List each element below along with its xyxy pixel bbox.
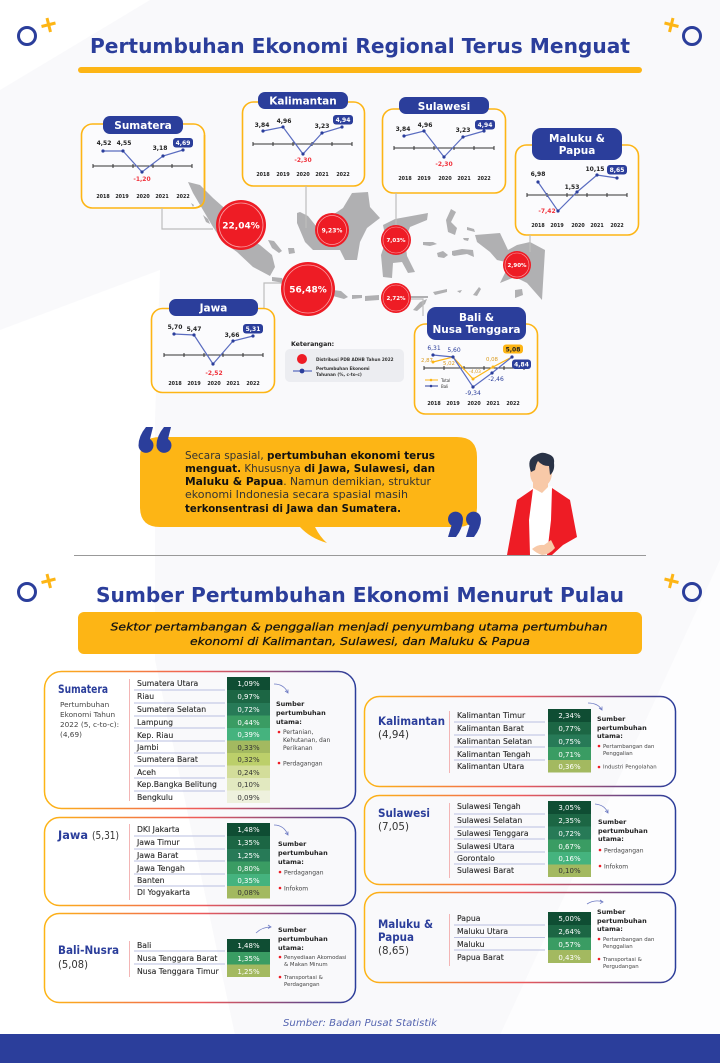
panel: Sulawesi provinces: 3,05% xyxy=(558,804,581,812)
panel: Sumatera provinces: Kehutanan, dan xyxy=(283,737,331,744)
panel: Maluku and Papua chart: 2022 xyxy=(610,223,624,229)
panel: Maluku and Papua provinces: 0,57% xyxy=(558,941,581,949)
panel: Kalimantan provinces: Penggalian xyxy=(603,751,633,757)
panel: Bali-Nusra provinces: Bali xyxy=(137,941,151,950)
bubble: Jawa share: 56,48% xyxy=(289,286,327,296)
panel: Sumatera chart: 2018 xyxy=(96,194,110,200)
panel: Sulawesi provinces: (7,05) xyxy=(378,821,409,833)
panel: Kalimantan provinces: 2,34% xyxy=(558,712,581,720)
panel: Jawa provinces: Infokom xyxy=(284,886,308,892)
panel: Sumatera chart: 2022 xyxy=(176,194,190,200)
callout: quote bubble: terkonsentrasi di Jawa dan Sumatera. xyxy=(185,503,401,515)
map: Sulawesi xyxy=(381,213,428,278)
panel: Sumatera provinces: 0,39% xyxy=(237,731,260,739)
panel: Jawa provinces: DKI Jakarta xyxy=(137,825,180,834)
panel: Bali and Nusa Tenggara chart: 2022 xyxy=(506,401,520,407)
panel: Sulawesi chart xyxy=(382,97,506,193)
panel: Sumatera provinces: Bengkulu xyxy=(137,793,173,802)
panel: Kalimantan provinces: Kalimantan xyxy=(378,714,445,728)
panel: Jawa provinces: Banten xyxy=(137,876,165,885)
panel: Sumatera provinces: 0,33% xyxy=(237,744,260,752)
panel: Sumatera provinces: 0,09% xyxy=(237,794,260,802)
panel: Kalimantan chart: 3,84 xyxy=(255,122,269,129)
panel: Bali and Nusa Tenggara chart: Bali xyxy=(441,384,448,389)
bubble: Maluku Papua share: 2,90% xyxy=(507,263,527,269)
subtitle banner: Sektor pertambangan & penggalian menjadi penyumbang utama pertumbuhan xyxy=(110,620,608,634)
legend xyxy=(285,341,404,382)
panel: Maluku and Papua provinces: Maluku & xyxy=(378,917,433,931)
panel: Sulawesi provinces: pertumbuhan xyxy=(598,827,648,835)
panel: Bali-Nusra provinces: Nusa Tenggara Barat xyxy=(137,954,217,963)
panel: Sumatera chart xyxy=(82,116,204,208)
panel: Maluku and Papua chart: 2021 xyxy=(590,223,604,229)
bubble: Sumatera share xyxy=(216,200,266,250)
panel: Bali and Nusa Tenggara chart xyxy=(414,307,538,414)
decoration: section right ring and plus xyxy=(664,574,700,600)
callout: quote bubble: menguat. Khususnya di Jawa, Sulawesi, dan xyxy=(185,463,435,475)
panel: Bali and Nusa Tenggara chart: -2,46 xyxy=(488,376,504,383)
panel: Sumatera chart: 4,52 xyxy=(97,140,111,147)
panel: Bali-Nusra provinces: Penyediaan Akomodasi xyxy=(284,955,346,961)
panel: Jawa provinces: 0,08% xyxy=(237,889,260,897)
panel: Jawa provinces: 0,80% xyxy=(237,865,260,873)
panel: Sulawesi provinces: Sumber xyxy=(598,818,627,826)
panel: Bali and Nusa Tenggara chart: Total xyxy=(440,378,450,383)
panel: Bali and Nusa Tenggara chart: 2020 xyxy=(467,401,481,407)
label: Jawa: Jawa xyxy=(199,302,227,314)
panel: Maluku and Papua provinces: Pergudangan xyxy=(603,964,639,970)
panel: Bali and Nusa Tenggara chart: 2018 xyxy=(427,401,441,407)
panel: Maluku and Papua provinces: Sumber xyxy=(597,908,626,916)
panel: Sumatera provinces: Sumatera Selatan xyxy=(137,705,206,714)
label: Kalimantan: Kalimantan xyxy=(269,96,337,108)
panel: Bali and Nusa Tenggara chart: 5,08 xyxy=(506,346,520,354)
bubble: Bali Nusa Tenggara share xyxy=(381,283,411,313)
panel: Sulawesi provinces: 2,35% xyxy=(558,817,581,825)
panel: Jawa chart: 5,70 xyxy=(168,324,182,331)
map: Papua xyxy=(475,233,545,300)
panel: Maluku and Papua chart: 2020 xyxy=(571,223,585,229)
panel: Kalimantan chart: 2018 xyxy=(256,172,270,178)
legend: Keterangan: xyxy=(291,341,334,348)
title underline xyxy=(78,67,642,73)
map of Indonesia xyxy=(162,182,545,316)
panel: Maluku and Papua provinces: Pertambangan dan xyxy=(603,937,654,943)
panel: Maluku and Papua chart: 1,53 xyxy=(565,184,579,191)
panel: Kalimantan provinces: Pertambangan dan xyxy=(603,744,654,750)
panel: Sumatera provinces: Lampung xyxy=(137,718,173,727)
panel: Jawa chart: 2021 xyxy=(226,381,240,387)
connector: Kalimantan xyxy=(305,186,307,228)
panel: Maluku and Papua provinces: Papua Barat xyxy=(457,953,504,962)
panel: Kalimantan provinces: Sumber xyxy=(597,715,626,723)
panel: Sumatera provinces: 0,32% xyxy=(237,756,260,764)
panel: Sumatera provinces: 0,24% xyxy=(237,769,260,777)
panel: Jawa chart: 2020 xyxy=(207,381,221,387)
label: Bali and Nusa Tenggara xyxy=(427,307,526,340)
panel: Jawa chart: 2022 xyxy=(246,381,260,387)
panel: Sumatera chart: 4,69 xyxy=(176,140,190,147)
panel: Maluku and Papua provinces: Papua xyxy=(457,914,481,923)
callout: quote bubble: Secara spasial, pertumbuhan ekonomi terus xyxy=(185,450,435,462)
decoration: top left ring and plus xyxy=(18,18,56,44)
panel: Maluku and Papua provinces: (8,65) xyxy=(378,945,409,957)
source note: Sumber: Badan Pusat Statistik xyxy=(283,1018,438,1029)
panel: Sumatera provinces: Kep. Riau xyxy=(137,731,173,740)
panel: Jawa chart xyxy=(152,299,274,392)
panel: Sulawesi provinces: 0,72% xyxy=(558,830,581,838)
panel: Jawa provinces: DI Yogyakarta xyxy=(137,888,190,897)
panel: Sumatera chart: 2020 xyxy=(136,194,150,200)
panel: Sumatera provinces: pertumbuhan xyxy=(276,709,326,717)
panel: Sumatera provinces: 0,72% xyxy=(237,706,260,714)
panel: Bali-Nusra provinces: & Makan Minum xyxy=(284,962,328,968)
panel: Kalimantan provinces: pertumbuhan xyxy=(597,724,647,732)
panel: Jawa provinces: 1,35% xyxy=(237,839,260,847)
panel: Sumatera chart: 2021 xyxy=(155,194,169,200)
panel: Jawa chart: 3,66 xyxy=(225,332,239,339)
panel: Bali-Nusra provinces: Transportasi & xyxy=(283,975,324,981)
decoration: section left ring and plus xyxy=(18,574,56,600)
panel: Jawa chart: 2019 xyxy=(187,381,201,387)
panel: Sumatera provinces: Pertanian, xyxy=(283,729,314,736)
map: Sumatra xyxy=(188,182,295,276)
panel: Bali and Nusa Tenggara chart: 5,02 xyxy=(443,361,455,367)
bubble: Kalimantan share xyxy=(315,213,349,247)
panel: Maluku and Papua chart xyxy=(516,128,638,235)
panel: Sulawesi chart: 2022 xyxy=(477,176,491,182)
panel: Sumatera provinces: (4,69) xyxy=(60,730,82,739)
subtitle banner xyxy=(78,612,642,654)
panel: Sumatera provinces: Perikanan xyxy=(283,745,313,752)
bubble: Sumatera share: 22,04% xyxy=(222,222,260,232)
panel: Sumatera provinces: Ekonomi Tahun xyxy=(60,710,115,719)
panel: Jawa chart: 5,47 xyxy=(187,326,201,333)
panel: Sulawesi provinces: Perdagangan xyxy=(604,848,644,854)
panel: Sumatera provinces: Perdagangan xyxy=(283,760,323,768)
panel: Jawa chart: 5,31 xyxy=(246,326,260,333)
panel: Kalimantan chart: 2022 xyxy=(336,172,350,178)
panel: Sulawesi chart: 2021 xyxy=(457,176,471,182)
panel: Bali-Nusra provinces xyxy=(44,914,356,1002)
bubble: Jawa share xyxy=(281,262,335,316)
panel: Kalimantan provinces: Kalimantan Tengah xyxy=(457,750,531,759)
callout: quote bubble: ekonomi Indonesia secara spasial masih xyxy=(185,489,408,501)
panel: Maluku and Papua provinces: utama: xyxy=(597,925,623,933)
panel: Sulawesi provinces: 0,67% xyxy=(558,843,581,851)
panel: Maluku and Papua chart: -7,42 xyxy=(538,208,556,215)
label: Maluku and Papua: Papua xyxy=(559,145,595,157)
panel: Bali-Nusra provinces: Nusa Tenggara Timur xyxy=(137,967,220,976)
panel: Kalimantan chart: 2019 xyxy=(276,172,290,178)
map: Java xyxy=(272,277,379,301)
panel: Jawa provinces: Jawa Tengah xyxy=(136,864,185,873)
panel: Kalimantan provinces: Industri Pengolahan xyxy=(603,764,657,770)
divider xyxy=(74,555,646,556)
panel: Sulawesi chart: 2018 xyxy=(398,176,412,182)
panel: Sulawesi provinces: Infokom xyxy=(604,864,628,870)
Sumatera frame over map xyxy=(180,135,204,208)
panel: Jawa provinces: (5,31) xyxy=(92,830,119,842)
panel: Kalimantan provinces: 0,71% xyxy=(558,751,581,759)
panel: Sumatera provinces: Kep.Bangka Belitung xyxy=(137,780,217,789)
panel: Sulawesi chart: 2020 xyxy=(438,176,452,182)
panel: Maluku and Papua chart: 10,15 xyxy=(586,166,604,173)
panel: Maluku and Papua provinces: Penggalian xyxy=(603,944,633,950)
panel: Sumatera provinces: 0,10% xyxy=(237,781,260,789)
panel: Bali-Nusra provinces: 1,48% xyxy=(237,942,260,950)
panel: Bali and Nusa Tenggara chart: 2019 xyxy=(446,401,460,407)
panel: Sumatera provinces xyxy=(44,672,356,808)
panel: Sumatera chart: 3,18 xyxy=(153,145,167,152)
bubble: Sulawesi share xyxy=(381,225,411,255)
panel: Bali-Nusra provinces: Sumber xyxy=(278,926,307,934)
panel: Kalimantan chart xyxy=(242,92,364,186)
panel: Sulawesi provinces: Sulawesi Tenggara xyxy=(457,829,529,838)
panel: Maluku and Papua provinces xyxy=(364,892,676,982)
panel: Jawa provinces: pertumbuhan xyxy=(278,849,328,857)
panel: Sulawesi provinces: Sulawesi Utara xyxy=(457,842,515,851)
panel: Maluku and Papua chart: 8,65 xyxy=(610,167,624,174)
panel: Jawa chart: 2018 xyxy=(168,381,182,387)
panel: Sumatera provinces: Sumatera Utara xyxy=(137,679,199,688)
panel: Kalimantan provinces: (4,94) xyxy=(378,729,409,741)
panel: Sumatera provinces: utama: xyxy=(276,718,302,726)
panel: Sulawesi chart: -2,30 xyxy=(435,161,453,168)
panel: Maluku and Papua provinces: pertumbuhan xyxy=(597,917,647,925)
label: Maluku and Papua xyxy=(532,128,622,160)
panel: Maluku and Papua chart: 6,98 xyxy=(531,171,545,178)
panel: Jawa provinces xyxy=(44,818,356,906)
panel: Sumatera provinces: Sumatera Barat xyxy=(137,755,198,764)
callout: quote bubble: Maluku & Papua . Namun demikian, struktur xyxy=(185,476,432,488)
panel: Sumatera provinces: Riau xyxy=(137,692,154,701)
connector: Jawa xyxy=(264,283,282,308)
panel: Jawa provinces: Jawa Barat xyxy=(136,851,178,860)
footer band xyxy=(0,1034,720,1063)
subtitle banner: ekonomi di Kalimantan, Sulawesi, dan Maluku & Papua xyxy=(190,635,530,648)
panel: Kalimantan provinces: Kalimantan Selatan xyxy=(457,737,532,746)
panel: Kalimantan provinces: utama: xyxy=(597,732,623,740)
panel: Sumatera provinces: Jambi xyxy=(136,743,158,752)
connector: Bali xyxy=(410,299,423,316)
panel: Sulawesi provinces: 0,16% xyxy=(558,855,581,863)
panel: Jawa provinces: utama: xyxy=(278,858,304,866)
panel: Jawa chart: -2,52 xyxy=(205,370,223,377)
label: Bali and Nusa Tenggara: Bali & xyxy=(459,312,494,324)
panel: Kalimantan provinces: Kalimantan Timur xyxy=(457,711,526,720)
title: Pertumbuhan Ekonomi Regional Terus Menguat xyxy=(90,34,630,58)
panel: Kalimantan chart: -2,30 xyxy=(294,157,312,164)
panel: Kalimantan provinces: 0,77% xyxy=(558,725,581,733)
panel: Bali and Nusa Tenggara chart: 5,60 xyxy=(447,347,461,354)
panel: Bali and Nusa Tenggara chart: -9,34 xyxy=(465,390,481,397)
panel: Bali and Nusa Tenggara chart: 2,87 xyxy=(421,358,433,364)
icon: opening quote mark xyxy=(138,427,171,453)
panel: Sulawesi chart: 3,84 xyxy=(396,126,410,133)
map: Maluku xyxy=(423,209,491,258)
panel: Kalimantan chart: 2020 xyxy=(296,172,310,178)
panel: Jawa provinces: 1,48% xyxy=(237,826,260,834)
panel: Bali-Nusra provinces: Bali-Nusra xyxy=(58,943,119,957)
panel: Jawa provinces: Jawa Timur xyxy=(136,838,180,847)
panel: Sulawesi chart: 2019 xyxy=(417,176,431,182)
panel: Jawa provinces: 1,25% xyxy=(237,852,260,860)
panel: Sulawesi provinces: 0,10% xyxy=(558,867,581,875)
map: Nusa Tenggara xyxy=(410,287,481,311)
map: Kalimantan xyxy=(297,192,380,260)
panel: Maluku and Papua chart: 2019 xyxy=(550,223,564,229)
panel: Sumatera provinces: 1,09% xyxy=(237,680,260,688)
panel: Jawa provinces: Sumber xyxy=(278,840,307,848)
panel: Bali and Nusa Tenggara chart: 2021 xyxy=(486,401,500,407)
illustration: man in red jacket xyxy=(507,453,577,555)
panel: Sulawesi provinces: utama: xyxy=(598,835,624,843)
connector: Sulawesi xyxy=(395,193,397,226)
panel: Maluku and Papua provinces: 2,64% xyxy=(558,928,581,936)
panel: Maluku and Papua provinces: 5,00% xyxy=(558,915,581,923)
callout: quote bubble xyxy=(140,437,477,543)
panel: Sulawesi provinces: Sulawesi xyxy=(378,806,430,820)
panel: Sumatera chart: 4,55 xyxy=(117,140,131,147)
panel: Sulawesi chart: 4,94 xyxy=(478,122,492,129)
panel: Sumatera chart: -1,20 xyxy=(133,176,151,183)
panel: Sulawesi provinces: Sulawesi Barat xyxy=(457,866,514,875)
panel: Sumatera provinces: 0,44% xyxy=(237,719,260,727)
icon: closing quote mark xyxy=(448,512,481,537)
panel: Bali and Nusa Tenggara chart: 4,84 xyxy=(514,362,529,368)
panel: Jawa provinces: Perdagangan xyxy=(284,870,324,876)
label: Bali and Nusa Tenggara: Nusa Tenggara xyxy=(432,324,520,336)
heading: section two: Sumber Pertumbuhan Ekonomi Menurut Pulau xyxy=(96,583,624,607)
panel: Maluku and Papua provinces: Maluku Utara xyxy=(457,927,508,936)
panel: Maluku and Papua provinces: 0,43% xyxy=(558,954,581,962)
panel: Sumatera provinces: Aceh xyxy=(137,768,156,777)
panel: Kalimantan provinces: 0,36% xyxy=(558,763,581,771)
legend: Distribusi PDB ADHB Tahun 2022 xyxy=(316,357,394,362)
panel: Sulawesi provinces: Sulawesi Selatan xyxy=(457,816,522,825)
panel: Bali-Nusra provinces: Perdagangan xyxy=(284,982,320,988)
label: Maluku and Papua: Maluku & xyxy=(549,133,605,145)
panel: Bali and Nusa Tenggara chart: 6,31 xyxy=(427,345,441,352)
panel: Sulawesi provinces: Sulawesi Tengah xyxy=(457,802,521,811)
panel: Sulawesi provinces: Gorontalo xyxy=(457,854,495,863)
connector: Sumatera xyxy=(162,208,213,229)
bubble: Kalimantan share: 9,23% xyxy=(322,228,342,234)
panel: Sumatera provinces: Pertumbuhan xyxy=(60,700,109,709)
panel: Maluku and Papua provinces: Maluku xyxy=(457,940,485,949)
panel: Bali-Nusra provinces: pertumbuhan xyxy=(278,935,328,943)
bubble: Sulawesi share: 7,03% xyxy=(386,238,406,244)
panel: Maluku and Papua provinces: Papua xyxy=(378,930,414,944)
panel: Bali-Nusra provinces: 1,35% xyxy=(237,955,260,963)
panel: Bali and Nusa Tenggara chart: 0,08 xyxy=(486,357,499,363)
panel: Kalimantan chart: 3,23 xyxy=(315,123,329,130)
panel: Sulawesi chart: 3,23 xyxy=(456,127,470,134)
label: Sulawesi: Sulawesi xyxy=(418,101,470,113)
legend: Pertumbuhan Ekonomi xyxy=(316,366,370,371)
panel: Kalimantan provinces: Kalimantan Barat xyxy=(457,724,524,733)
panel: Sulawesi provinces xyxy=(364,796,676,884)
panel: Bali-Nusra provinces: utama: xyxy=(278,944,304,952)
panel: Jawa provinces: Jawa xyxy=(57,828,88,842)
panel: Bali-Nusra provinces: 1,25% xyxy=(237,968,260,976)
panel: Kalimantan provinces xyxy=(364,696,676,786)
panel: Kalimantan provinces: 0,75% xyxy=(558,738,581,746)
panel: Jawa provinces: 0,35% xyxy=(237,877,260,885)
panel: Sulawesi chart: 4,96 xyxy=(418,122,432,129)
panel: Kalimantan chart: 2021 xyxy=(315,172,329,178)
panel: Sumatera provinces: 0,97% xyxy=(237,693,260,701)
panel: Sumatera provinces: Sumber xyxy=(276,700,305,708)
panel: Kalimantan chart: 4,96 xyxy=(277,118,291,125)
panel: Kalimantan provinces: Kalimantan Utara xyxy=(457,762,525,771)
panel: Sumatera chart: 2019 xyxy=(115,194,129,200)
decoration: top right ring and plus xyxy=(664,18,700,44)
panel: Sumatera provinces: 2022 (5, c-to-c): xyxy=(60,720,119,729)
panel: Bali and Nusa Tenggara chart: -4,03 xyxy=(469,369,481,375)
bubble: Maluku Papua share xyxy=(503,251,531,279)
connector: Maluku xyxy=(529,235,531,252)
panel: Maluku and Papua provinces: Transportasi & xyxy=(602,957,643,963)
legend: Tahunan (%, c-to-c) xyxy=(316,372,362,377)
panel: Maluku and Papua chart: 2018 xyxy=(531,223,545,229)
panel: Sumatera provinces: Sumatera xyxy=(58,682,108,696)
panel: Kalimantan chart: 4,94 xyxy=(336,117,350,124)
bubble: Bali Nusa Tenggara share: 2,72% xyxy=(386,296,406,302)
panel: Bali-Nusra provinces: (5,08) xyxy=(58,959,88,971)
label: Sumatera: Sumatera xyxy=(114,120,172,132)
